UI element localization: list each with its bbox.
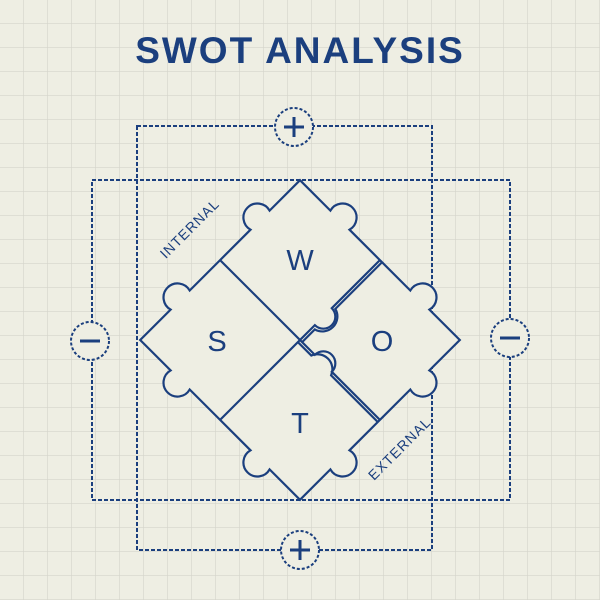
letter T: T xyxy=(291,408,309,440)
letter S: S xyxy=(207,326,227,358)
icon: minus right xyxy=(491,319,529,357)
letter O: O xyxy=(371,326,393,358)
frame: vertical dashed rectangle xyxy=(137,126,432,550)
title: SWOT ANALYSIS xyxy=(135,30,465,71)
letter W: W xyxy=(286,245,314,277)
label: external: EXTERNAL xyxy=(365,414,434,483)
icon: minus left xyxy=(71,322,109,360)
icon: plus top xyxy=(275,108,313,146)
puzzle diamond xyxy=(115,155,485,525)
label: internal: INTERNAL xyxy=(157,196,222,261)
icon: plus bottom xyxy=(281,531,319,569)
frame: horizontal dashed rectangle xyxy=(92,180,510,500)
